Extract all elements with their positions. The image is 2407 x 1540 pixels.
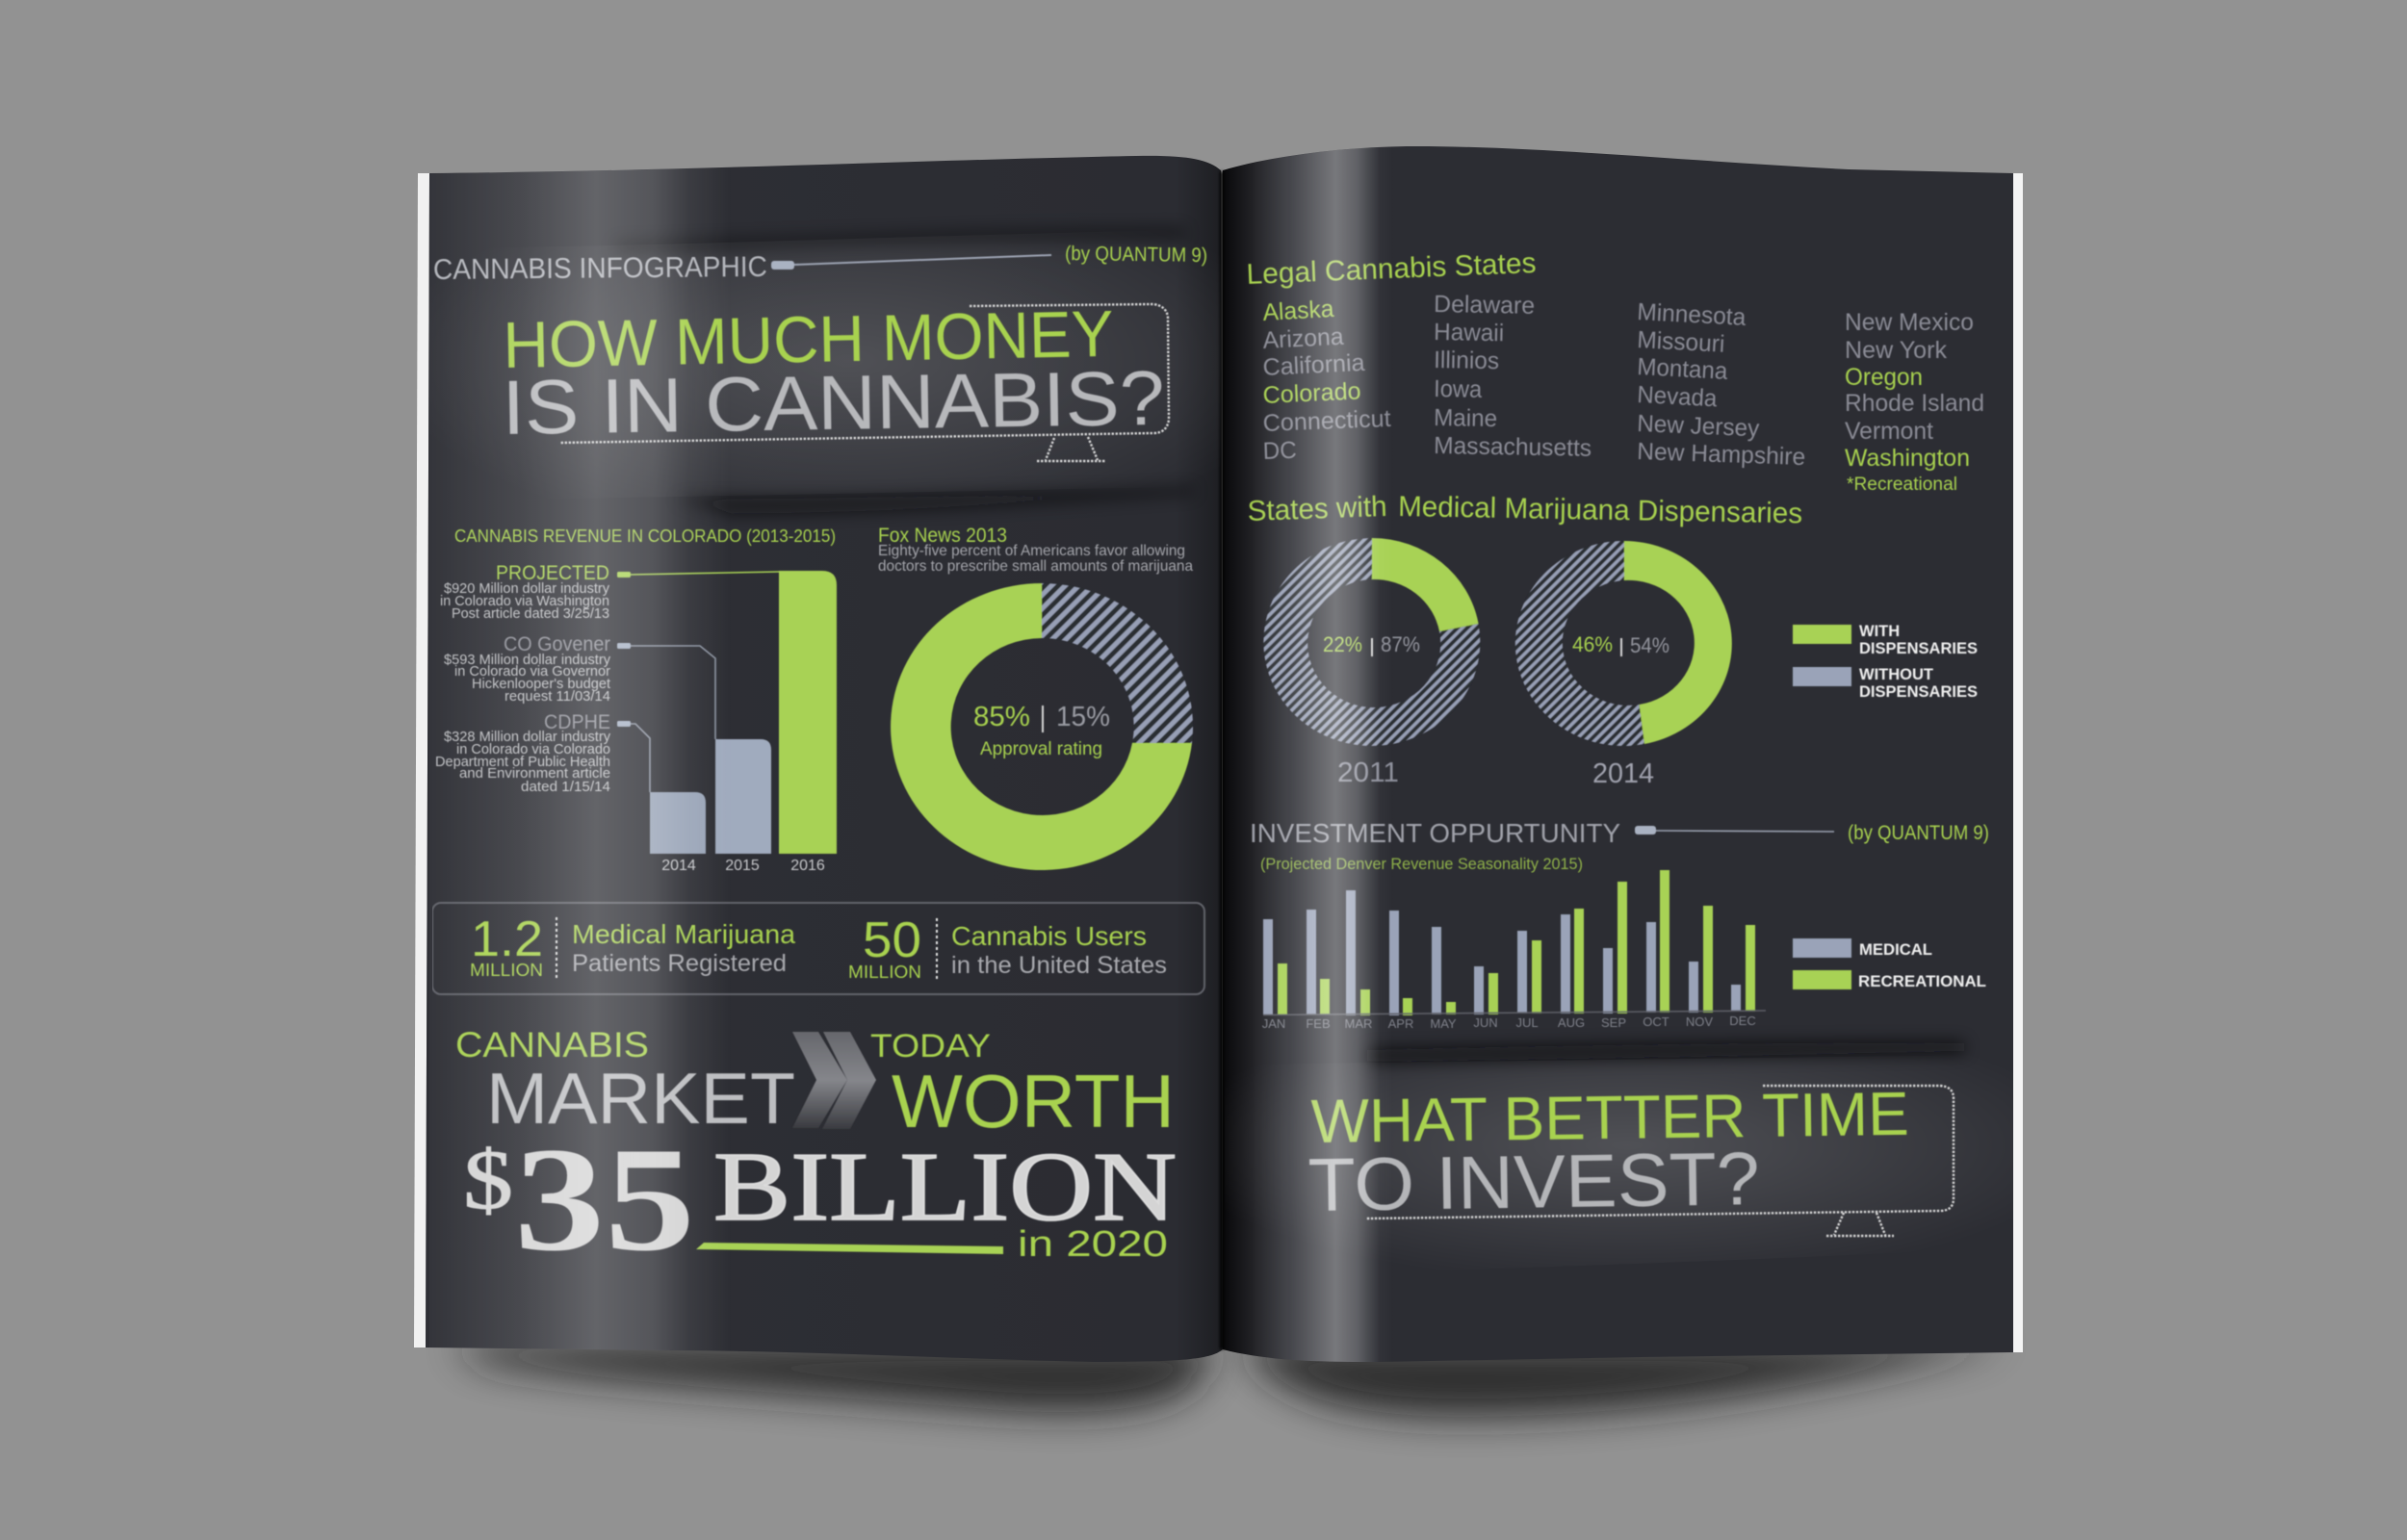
state list column 3 bbox=[1637, 298, 1806, 471]
month labels: JAN bbox=[1262, 1016, 1285, 1031]
figure: $35 billion: $ bbox=[463, 1134, 513, 1227]
legend: medical and recreational: RECREATIONAL bbox=[1858, 973, 1986, 990]
stat: 1.2 million patients: Patients Registered bbox=[572, 950, 787, 977]
stat: 1.2 million patients: Medical Marijuana bbox=[572, 919, 795, 949]
month labels: DEC bbox=[1729, 1014, 1756, 1028]
donut chart: 2014 bbox=[1515, 541, 1732, 789]
left header band bbox=[429, 229, 1221, 514]
recreational bars bbox=[1278, 870, 1755, 1015]
state list column 1: Arizona bbox=[1262, 323, 1344, 354]
month labels: MAR bbox=[1345, 1016, 1372, 1031]
heading: revenue chart: CANNABIS REVENUE IN COLORADO (2013-2015) bbox=[454, 526, 836, 546]
header strip: investment opportunity: INVESTMENT OPPURTUNITY bbox=[1250, 818, 1620, 848]
page content bbox=[432, 243, 1989, 1282]
state list column 3: Montana bbox=[1637, 353, 1728, 385]
month labels: FEB bbox=[1306, 1016, 1331, 1031]
underline with in 2020 bbox=[696, 1224, 1168, 1265]
page edge: right white strip bbox=[2012, 173, 2023, 1352]
heading: legal cannabis states: Legal Cannabis States bbox=[1246, 247, 1537, 291]
right bottom band bbox=[1225, 1041, 2013, 1276]
legend: medical and recreational: MEDICAL bbox=[1859, 941, 1932, 959]
state list column 1 bbox=[1262, 295, 1391, 465]
state list column 4: New York bbox=[1845, 337, 1947, 364]
state list column 4: New Mexico bbox=[1845, 309, 1974, 336]
stats panel bbox=[432, 903, 1204, 994]
legend: dispensaries: DISPENSARIES bbox=[1859, 640, 1978, 657]
page edge: left white strip bbox=[414, 173, 429, 1348]
shadow under magazine bbox=[453, 1343, 2007, 1417]
bar chart: monthly revenue bbox=[1262, 870, 1766, 1031]
state list column 2: Hawaii bbox=[1434, 319, 1504, 346]
month labels: APR bbox=[1388, 1016, 1413, 1031]
header strip: cannabis infographic bbox=[433, 243, 1207, 286]
month labels: JUL bbox=[1515, 1015, 1539, 1030]
donut chart: 2011: 22% bbox=[1323, 632, 1362, 656]
legend: dispensaries: WITHOUT bbox=[1859, 666, 1933, 683]
state list column 2: Massachusetts bbox=[1434, 432, 1592, 462]
donut chart: 2011: 87% bbox=[1381, 632, 1420, 656]
icon: double chevron arrow bbox=[792, 1032, 876, 1129]
spine bbox=[1220, 171, 1224, 1349]
state list column 4: Washington bbox=[1845, 445, 1970, 472]
figure: $35 billion bbox=[463, 1116, 1177, 1282]
stat: 50 million users: MILLION bbox=[848, 962, 921, 982]
left page bbox=[426, 156, 1223, 1362]
legend: medical and recreational bbox=[1793, 938, 1986, 990]
state list column 1: Connecticut bbox=[1262, 405, 1391, 437]
bar chart: colorado revenue bbox=[650, 571, 837, 874]
market headline: MARKET bbox=[486, 1058, 795, 1139]
month labels: JUN bbox=[1473, 1015, 1498, 1030]
donut chart: 2014: 54% bbox=[1630, 633, 1669, 657]
state list column 1: Alaska bbox=[1262, 295, 1334, 326]
donut chart: 2014: 46% bbox=[1572, 632, 1613, 656]
medical bars bbox=[1263, 890, 1741, 1015]
market headline: TODAY bbox=[870, 1028, 991, 1065]
page highlight: right bbox=[1265, 147, 1379, 1362]
callout: cdphe: dated 1/15/14 bbox=[521, 780, 610, 795]
donut chart: 2011: 2011 bbox=[1337, 757, 1399, 788]
callout: cdphe: $328 Million dollar industry bbox=[444, 730, 611, 745]
state list column 4 bbox=[1845, 309, 1984, 495]
title: how much money is in cannabis: HOW MUCH MONEY bbox=[503, 297, 1114, 382]
state list column 2 bbox=[1434, 291, 1592, 462]
legend: dispensaries: WITH bbox=[1859, 623, 1900, 640]
stat: 50 million users: 50 bbox=[863, 912, 921, 968]
donut chart: approval rating: 15% bbox=[1056, 702, 1110, 732]
state list column 4: Vermont bbox=[1845, 418, 1933, 445]
callout: projected: Post article dated 3/25/13 bbox=[452, 606, 609, 622]
header strip: cannabis infographic: (by QUANTUM 9) bbox=[1065, 243, 1207, 267]
month labels: NOV bbox=[1686, 1014, 1713, 1029]
donut chart: approval rating: 85% bbox=[973, 702, 1030, 732]
header strip: investment opportunity: (Projected Denver Revenue Seasonality 2015) bbox=[1260, 855, 1583, 873]
figure: $35 billion: BILLION bbox=[713, 1133, 1177, 1242]
month labels: OCT bbox=[1643, 1014, 1669, 1029]
callout: co governor: in Colorado via Governor bbox=[454, 664, 610, 680]
legend: dispensaries bbox=[1793, 623, 1978, 701]
state list column 4: *Recreational bbox=[1847, 475, 1957, 495]
callout: cdphe: in Colorado via Colorado bbox=[456, 742, 610, 757]
donut chart: approval rating: Approval rating bbox=[980, 739, 1102, 759]
state list column 3: New Jersey bbox=[1637, 410, 1760, 443]
underline with in 2020: in 2020 bbox=[1018, 1224, 1168, 1265]
state list column 1: California bbox=[1262, 349, 1365, 381]
state list column 3: Nevada bbox=[1637, 381, 1718, 412]
stat: 50 million users bbox=[848, 912, 1167, 982]
legend: dispensaries: DISPENSARIES bbox=[1859, 683, 1978, 701]
callout: co governor: $593 Million dollar industry bbox=[444, 653, 611, 668]
callout: cdphe: CDPHE bbox=[544, 711, 610, 733]
text: fox news: doctors to prescribe small amounts of marijuana bbox=[878, 558, 1193, 575]
month labels: SEP bbox=[1601, 1015, 1626, 1030]
header strip: investment opportunity: (by QUANTUM 9) bbox=[1848, 822, 1989, 844]
right page bbox=[1223, 146, 2013, 1362]
callout: co governor: CO Govener bbox=[504, 633, 610, 655]
state list column 4: Rhode Island bbox=[1845, 390, 1984, 417]
state list column 2: Illinios bbox=[1434, 346, 1499, 374]
dotted monitor frame 2 bbox=[1366, 1086, 1954, 1236]
bar chart: colorado revenue: 2014 bbox=[661, 858, 696, 874]
callout: projected: PROJECTED bbox=[496, 562, 609, 584]
callout: cdphe: and Environment article bbox=[459, 766, 610, 782]
bar chart: colorado revenue: 2015 bbox=[725, 858, 760, 874]
closing title: what better time to invest: WHAT BETTER TIME bbox=[1310, 1079, 1909, 1156]
state list column 3: Minnesota bbox=[1637, 298, 1747, 331]
bar chart: colorado revenue: 2016 bbox=[790, 858, 825, 874]
month labels bbox=[1262, 1014, 1756, 1031]
callout: projected bbox=[440, 562, 779, 622]
month labels: MAY bbox=[1430, 1016, 1457, 1031]
heading: medical dispensaries: States with bbox=[1247, 491, 1387, 527]
callout: projected: in Colorado via Washington bbox=[440, 594, 609, 609]
header strip: investment opportunity bbox=[1250, 818, 1989, 873]
state list column 3: Missouri bbox=[1637, 326, 1725, 358]
stat: 1.2 million patients: MILLION bbox=[470, 961, 543, 980]
donut chart: 2014: 2014 bbox=[1592, 758, 1654, 789]
figure: $35 billion: 35 bbox=[514, 1116, 695, 1282]
closing title: what better time to invest bbox=[1307, 1079, 1909, 1227]
closing title: what better time to invest: TO INVEST? bbox=[1307, 1136, 1760, 1227]
stat: 1.2 million patients bbox=[470, 911, 795, 980]
title: how much money is in cannabis bbox=[502, 297, 1165, 450]
callout: cdphe bbox=[435, 711, 650, 795]
state list column 1: Colorado bbox=[1262, 377, 1361, 409]
callout: projected: $920 Million dollar industry bbox=[444, 581, 610, 597]
text: fox news: Fox News 2013 bbox=[878, 525, 1007, 547]
state list column 1: DC bbox=[1262, 437, 1297, 465]
state list column 2: Iowa bbox=[1434, 375, 1482, 403]
state list column 2: Delaware bbox=[1434, 291, 1535, 320]
heading: medical dispensaries: Medical Marijuana Dispensaries bbox=[1398, 491, 1802, 529]
page highlight: left bbox=[439, 167, 707, 1350]
donut chart: 2011 bbox=[1263, 538, 1480, 788]
state list column 3: New Hampshire bbox=[1637, 438, 1806, 471]
title: how much money is in cannabis: IS IN CANNABIS? bbox=[502, 355, 1165, 450]
callout: co governor: Hickenlooper's budget bbox=[472, 677, 610, 692]
dotted monitor frame bbox=[560, 304, 1169, 461]
header strip: cannabis infographic: CANNABIS INFOGRAPHIC bbox=[433, 251, 767, 286]
text: fox news: Eighty-five percent of Americans favor allowing bbox=[878, 543, 1185, 559]
callout: co governor: request 11/03/14 bbox=[505, 689, 610, 705]
text: fox news bbox=[878, 525, 1193, 575]
state list column 4: Oregon bbox=[1845, 364, 1923, 391]
market headline: CANNABIS bbox=[455, 1025, 649, 1065]
market headline bbox=[455, 1025, 1175, 1143]
market headline: WORTH bbox=[892, 1059, 1175, 1143]
callout: co governor bbox=[444, 633, 715, 739]
stat: 1.2 million patients: 1.2 bbox=[471, 911, 543, 967]
state list column 2: Maine bbox=[1434, 404, 1497, 432]
month labels: AUG bbox=[1558, 1015, 1585, 1030]
donut chart: approval rating bbox=[891, 583, 1193, 870]
stat: 50 million users: in the United States bbox=[951, 952, 1167, 979]
callout: cdphe: Department of Public Health bbox=[435, 755, 610, 770]
stat: 50 million users: Cannabis Users bbox=[951, 921, 1147, 951]
